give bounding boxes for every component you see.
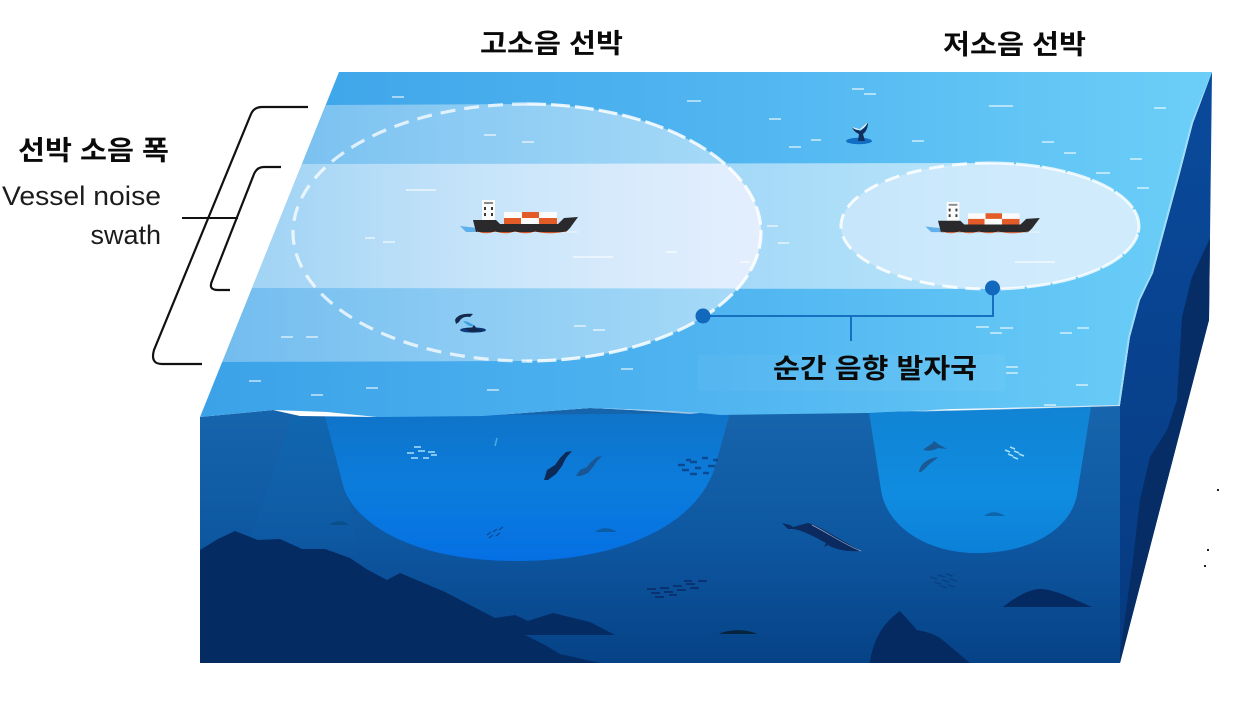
- surface wave dashes: [249, 89, 1166, 405]
- front underwater face: [200, 405, 1120, 663]
- icon: whale tail: [846, 122, 872, 144]
- heading: high-noise vessel: 고소음 선박: [480, 29, 623, 59]
- icon: dolphins underwater: [919, 441, 947, 472]
- faint outer sound cone left: [250, 417, 360, 560]
- high-noise footprint dashed outline: [293, 104, 761, 361]
- icon: blue whale: [782, 523, 861, 551]
- panel: ocean cross-section block: [200, 72, 1212, 663]
- small underwater noise zone: [869, 407, 1091, 553]
- icon: ship low noise: [925, 202, 1040, 233]
- callout connector: footprint lines: [703, 288, 993, 341]
- icon: ship high noise: [460, 200, 578, 233]
- bracket: outer swath: [153, 107, 308, 364]
- icon: whales diving: [544, 451, 602, 480]
- heading: low-noise vessel: 저소음 선박: [943, 30, 1086, 60]
- label: vessel noise swath English: swath: [90, 220, 161, 250]
- seabed rocks left: [200, 531, 615, 663]
- icon: dark fish school: [487, 458, 957, 597]
- patch behind footprint label: [698, 355, 1005, 391]
- top sea surface: [200, 72, 1212, 417]
- callout dot: high noise: [696, 308, 710, 324]
- specks: [1204, 489, 1219, 567]
- label: instantaneous acoustic footprint: 순간 음향 발자국: [773, 354, 977, 384]
- wide vessel noise band: [222, 104, 761, 362]
- seabed mound right: [1003, 589, 1092, 607]
- seabed rock peak: [870, 611, 970, 663]
- icon: dolphins at surface: [455, 314, 486, 333]
- label: vessel noise swath English: Vessel noise: [2, 181, 161, 211]
- bracket connector line: [182, 217, 238, 219]
- narrow vessel noise band: [252, 163, 1139, 289]
- low-noise footprint fill: [841, 163, 1139, 289]
- core overlap in high-noise zone: [406, 164, 761, 288]
- bracket: inner swath: [211, 167, 281, 290]
- seabed cliff on side face: [1120, 238, 1210, 663]
- label: vessel noise swath Korean: 선박 소음 폭: [18, 136, 169, 166]
- large underwater noise zone: [325, 413, 730, 561]
- right side face of block: [1120, 72, 1212, 663]
- surface foam highlight: [273, 72, 1212, 417]
- icon: fish schools: [407, 438, 1024, 459]
- callout dot: low noise: [985, 280, 1000, 296]
- small seabed mounds: [329, 512, 1005, 634]
- low-noise footprint dashed outline: [841, 163, 1139, 289]
